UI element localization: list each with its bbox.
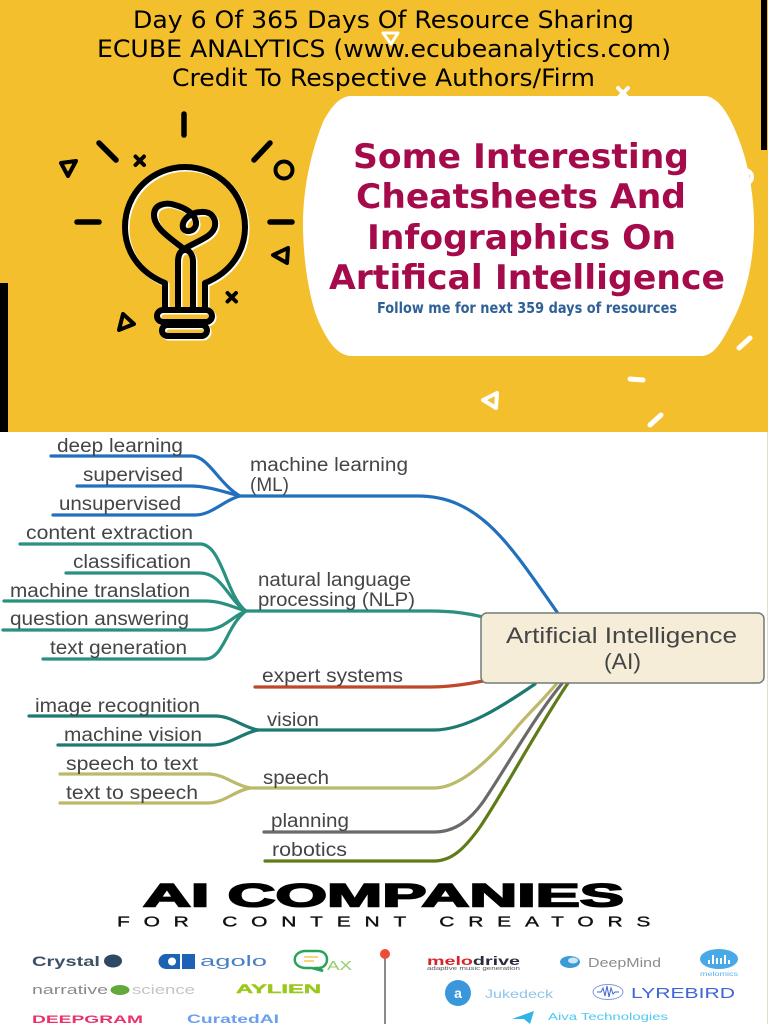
branch: natural language processing: classification <box>73 552 191 573</box>
branch: natural language processing: content extraction <box>26 523 193 544</box>
logo: Jukedeck: Jukedeck <box>485 987 554 1001</box>
logo: melodrive <box>427 954 521 972</box>
logo: AYLIEN: AYLIEN <box>236 984 321 996</box>
company logos <box>32 949 739 1024</box>
branch: robotics <box>265 680 570 861</box>
branch: natural language processing <box>3 523 483 659</box>
branch: speech <box>60 683 557 804</box>
branch: planning <box>264 680 565 832</box>
title: Infographics On <box>367 218 676 258</box>
branch: vision <box>29 684 535 746</box>
logo: LYREBIRD: LYREBIRD <box>631 985 735 1002</box>
central node: Artificial Intelligence: Artificial Intelligence <box>506 623 737 648</box>
central node: Artificial Intelligence: (AI) <box>604 649 641 674</box>
header: resource sharing credit text: Credit To Respective Authors/Firm <box>172 64 595 92</box>
mind map <box>3 436 764 861</box>
central node: Artificial Intelligence <box>481 613 764 683</box>
panel: yellow banner <box>0 0 768 432</box>
title: Cheatsheets And <box>356 177 686 217</box>
logo: agolo <box>159 953 267 970</box>
branch: vision: image recognition <box>35 696 200 717</box>
title: Some Interesting <box>353 137 689 177</box>
branch: natural language processing: processing (NLP) <box>258 590 415 611</box>
branch: natural language processing: natural language <box>258 570 411 591</box>
branch: robotics: robotics <box>272 840 347 861</box>
branch: natural language processing: machine translation <box>10 581 190 602</box>
logo: melomics <box>700 949 739 978</box>
branch: expert systems: expert systems <box>262 666 403 687</box>
logo: Crystal: Crystal <box>32 953 100 969</box>
logo: Jukedeck: a <box>454 985 462 1001</box>
logo: narrative science: narrative <box>32 982 108 997</box>
branch: speech: speech to text <box>66 754 199 775</box>
branch: speech: speech <box>263 768 329 789</box>
logo: DeepMind: DeepMind <box>588 955 661 970</box>
branch: natural language processing: text generation <box>50 638 187 659</box>
right edge line <box>767 432 768 1024</box>
timeline divider <box>380 949 390 1024</box>
logo: narrative science: science <box>132 982 195 997</box>
logo: QAX <box>295 951 352 973</box>
logo: QAX: AX <box>327 958 352 973</box>
panel: white title blob <box>303 96 754 356</box>
logo: agolo: agolo <box>200 953 267 970</box>
branch: vision: vision <box>267 710 319 731</box>
logo: Crystal <box>32 953 122 969</box>
header: resource sharing credit text <box>97 6 671 92</box>
branch: machine learning: machine learning <box>250 455 408 476</box>
heading: AI companies <box>117 878 650 930</box>
title: Artifical Intelligence <box>329 258 725 298</box>
heading: AI companies: FOR CONTENT CREATORS <box>117 913 650 930</box>
logo: Aiva Technologies <box>512 1011 668 1024</box>
branch: expert systems <box>255 666 483 687</box>
branch: machine learning: supervised <box>83 465 183 486</box>
branch: machine learning: deep learning <box>57 436 183 457</box>
logo: Jukedeck <box>445 980 554 1006</box>
branch: natural language processing: question answering <box>10 609 189 630</box>
branch: machine learning <box>51 436 557 612</box>
logo: Aiva Technologies: Aiva Technologies <box>548 1012 668 1023</box>
branch: speech: text to speech <box>66 783 198 804</box>
logo: narrative science <box>32 982 195 997</box>
header: resource sharing credit text: Day 6 Of 365 Days Of Resource Sharing <box>133 6 634 34</box>
logo: melodrive: adaptive music generation <box>427 966 520 972</box>
subtitle: Follow me for next 359 days of resources <box>377 299 677 317</box>
decorative white marks around title panel <box>383 33 752 425</box>
header: resource sharing credit text: ECUBE ANALYTICS (www.ecubeanalytics.com) <box>97 35 671 63</box>
icon: light bulb with rays <box>61 114 292 338</box>
branch: vision: machine vision <box>64 725 202 746</box>
heading: AI companies: AI COMPANIES <box>143 878 624 914</box>
logo: LYREBIRD <box>593 984 735 1002</box>
logo: DeepMind <box>560 955 661 970</box>
logo: melodrive: melo drive <box>427 954 521 968</box>
branch: machine learning: (ML) <box>250 475 289 496</box>
branch: machine learning: unsupervised <box>59 494 181 515</box>
title <box>329 137 725 298</box>
logo: melomics: melomics <box>700 971 739 978</box>
branch: planning: planning <box>271 811 349 832</box>
